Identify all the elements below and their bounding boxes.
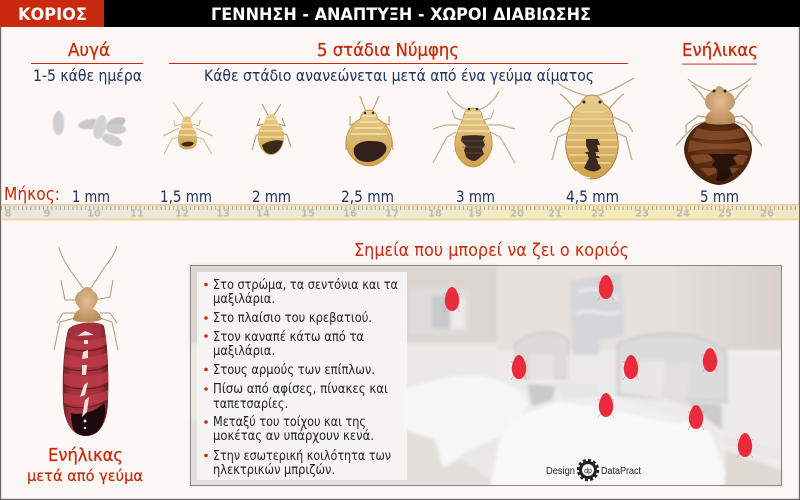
list: places where bed bugs live: μαξιλάρια. [213, 292, 275, 307]
column heading: nymph stages: 5 στάδια Νύμφης [317, 40, 459, 61]
measuring tape ruler: 12 [175, 208, 189, 220]
column heading: nymph stages [169, 40, 628, 85]
icon: nymph stage 3 [346, 96, 393, 166]
credit logo: Design [546, 466, 575, 477]
measuring tape ruler: 9 [44, 208, 51, 220]
measuring tape ruler: 11 [130, 208, 144, 220]
icon: nymph stage 5 [550, 78, 634, 179]
header bar: ΓΕΝΝΗΣΗ - ΑΝΑΠΤΥΞΗ - ΧΩΡΟΙ ΔΙΑΒΙΩΣΗΣ [211, 5, 591, 25]
column heading: eggs: 1-5 κάθε ημέρα [33, 66, 142, 85]
list: places where bed bugs live: ταπετσαρίες. [213, 397, 288, 412]
header bar: ΚΟΡΙΟΣ [18, 5, 87, 25]
column heading: nymph stages: Κάθε στάδιο ανανεώνεται μετά από ένα γεύμα αίματος [204, 66, 594, 85]
length labels row: 2 mm [252, 187, 291, 206]
list: places where bed bugs live: Στον καναπέ κάτω από τα [213, 330, 364, 345]
heading: places: Σημεία που μπορεί να ζει ο κοριός [354, 240, 629, 261]
measuring tape ruler: 19 [468, 208, 482, 220]
length labels row [4, 184, 739, 206]
credit logo: DataPract [601, 466, 641, 477]
list: places where bed bugs live [204, 278, 398, 478]
measuring tape ruler: 24 [676, 208, 690, 220]
length labels row: 4,5 mm [566, 187, 619, 206]
measuring tape ruler: 20 [510, 208, 524, 220]
length labels row: 5 mm [700, 187, 739, 206]
measuring tape ruler: 25 [718, 208, 732, 220]
measuring tape ruler: 10 [87, 208, 101, 220]
credit logo [546, 460, 641, 480]
icon: eggs [52, 110, 127, 149]
panel: list background [197, 272, 407, 480]
length labels row: 1,5 mm [160, 187, 212, 206]
header bar [0, 0, 800, 27]
caption: fed adult: μετά από γεύμα [27, 467, 143, 485]
caption: fed adult [27, 445, 143, 485]
measuring tape ruler: 13 [216, 208, 230, 220]
measuring tape ruler: 8 [5, 208, 12, 220]
measuring tape ruler: 18 [428, 208, 442, 220]
measuring tape ruler: 16 [343, 208, 357, 220]
list: places where bed bugs live: μαξιλάρια. [213, 344, 275, 359]
icon: nymph stage 2 [252, 104, 291, 155]
measuring tape ruler: 15 [301, 208, 315, 220]
column heading: adult: Ενήλικας [682, 40, 758, 61]
length labels row: Μήκος: [4, 184, 60, 205]
measuring tape ruler: 26 [760, 208, 774, 220]
list: places where bed bugs live: Στο στρώμα, τα σεντόνια και τα [213, 278, 398, 293]
list: places where bed bugs live: Πίσω από αφίσες, πίνακες και [213, 382, 388, 397]
list: places where bed bugs live: ηλεκτρικών μπριζών. [213, 463, 335, 478]
list: places where bed bugs live: Μεταξύ του τοίχου και της [213, 415, 366, 430]
measuring tape ruler: 22 [591, 208, 605, 220]
panel: bedroom photo [190, 265, 782, 486]
list: places where bed bugs live: Στην εσωτερική κοιλότητα των [213, 449, 391, 464]
measuring tape ruler [1, 204, 799, 220]
icon: adult bed bug [676, 78, 762, 185]
column heading: eggs: Αυγά [68, 40, 110, 61]
icon: fed adult bed bug [54, 246, 118, 436]
photo frame [190, 266, 782, 486]
measuring tape ruler: 21 [548, 208, 562, 220]
measuring tape ruler: 17 [385, 208, 399, 220]
icon: nymph stage 4 [433, 91, 515, 167]
caption: fed adult: Ενήλικας [48, 445, 123, 466]
measuring tape ruler: 14 [256, 208, 270, 220]
length labels row: 1 mm [72, 187, 110, 206]
list: places where bed bugs live: Στους αρμούς των επίπλων. [213, 363, 375, 378]
measuring tape ruler: 23 [635, 208, 649, 220]
icon: nymph stage 1 [163, 102, 213, 154]
icons: red bug markers [444, 275, 753, 458]
credit logo: dp [584, 468, 592, 475]
list: places where bed bugs live: Στο πλαίσιο του κρεβατιού. [213, 311, 372, 326]
length labels row: 2,5 mm [341, 187, 394, 206]
length labels row: 3 mm [456, 187, 495, 206]
list: places where bed bugs live: μοκέτας αν υπάρχουν κενά. [213, 429, 374, 444]
column heading: eggs [31, 40, 143, 85]
